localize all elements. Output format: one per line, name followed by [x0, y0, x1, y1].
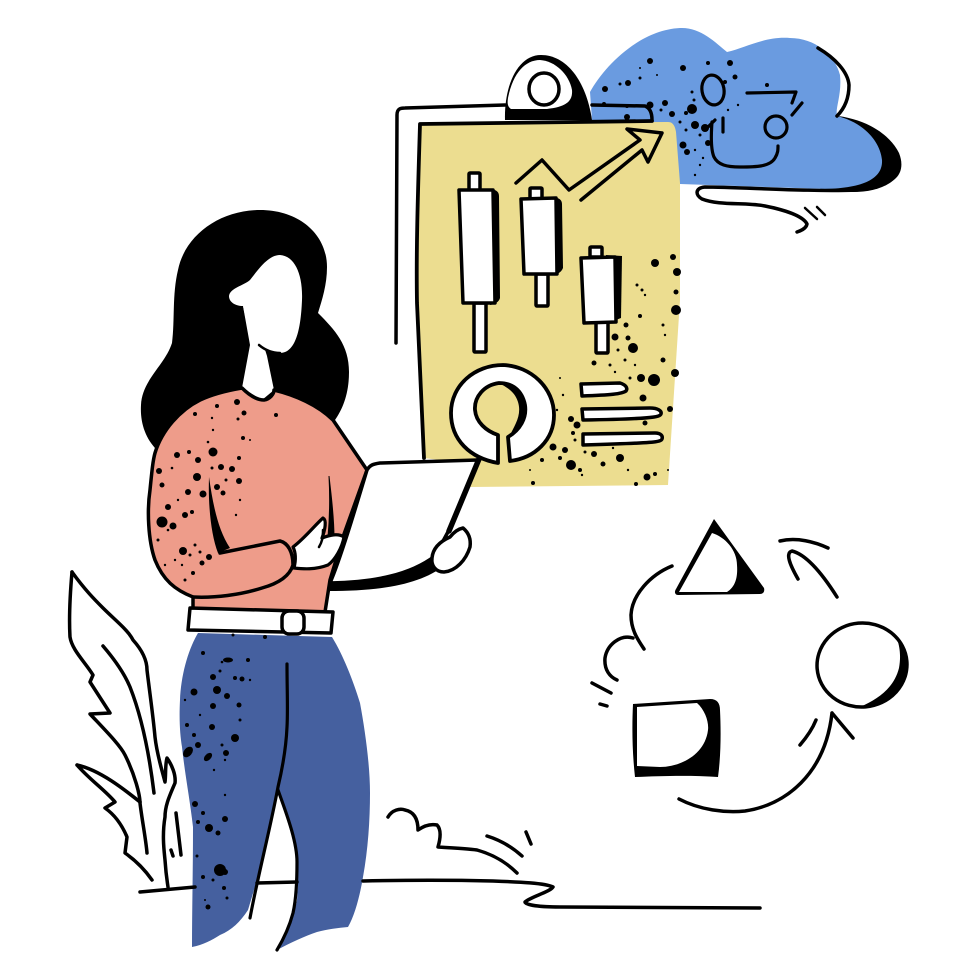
- panel: blue cloud: [590, 28, 901, 232]
- candlestick 1: [459, 173, 500, 352]
- board ink splatter: [529, 254, 681, 486]
- right hand: [432, 528, 470, 572]
- trend arrow: [516, 129, 662, 200]
- jeans: [180, 633, 370, 950]
- jeans folds: [250, 664, 297, 950]
- icon: circle: [814, 619, 910, 711]
- bush outline: [388, 809, 531, 873]
- cloud face marks: [700, 73, 802, 167]
- legend bars: [581, 383, 662, 445]
- candlestick 3: [581, 247, 622, 353]
- cycle arrows: [592, 540, 853, 812]
- hair: [141, 210, 349, 450]
- jaw line: [259, 345, 280, 353]
- forearm: [193, 541, 293, 597]
- cloud ink splatter: [602, 58, 769, 176]
- sweater: [148, 388, 367, 612]
- chest fold: [328, 476, 334, 538]
- ground line: [140, 880, 760, 908]
- sleeve fold: [209, 477, 230, 553]
- face: [229, 255, 302, 353]
- panel: yellow chart board: [417, 121, 681, 487]
- icon: square: [632, 699, 721, 777]
- plant: [70, 572, 181, 887]
- tablet: [330, 460, 478, 583]
- tablet shadow: [328, 545, 445, 591]
- figure: woman: [141, 210, 479, 950]
- panel: clipboard clip and frame: [396, 55, 652, 343]
- sweater ink splatter: [156, 399, 278, 582]
- neck: [242, 306, 274, 400]
- candlestick 2: [521, 188, 563, 306]
- donut chart: [451, 365, 554, 463]
- jeans ink splatter: [181, 634, 267, 910]
- cloud outline and swoosh: [697, 48, 857, 232]
- belt: [188, 608, 333, 634]
- stylus line: [449, 459, 479, 531]
- icon: triangle: [675, 519, 764, 595]
- left hand: [293, 518, 344, 569]
